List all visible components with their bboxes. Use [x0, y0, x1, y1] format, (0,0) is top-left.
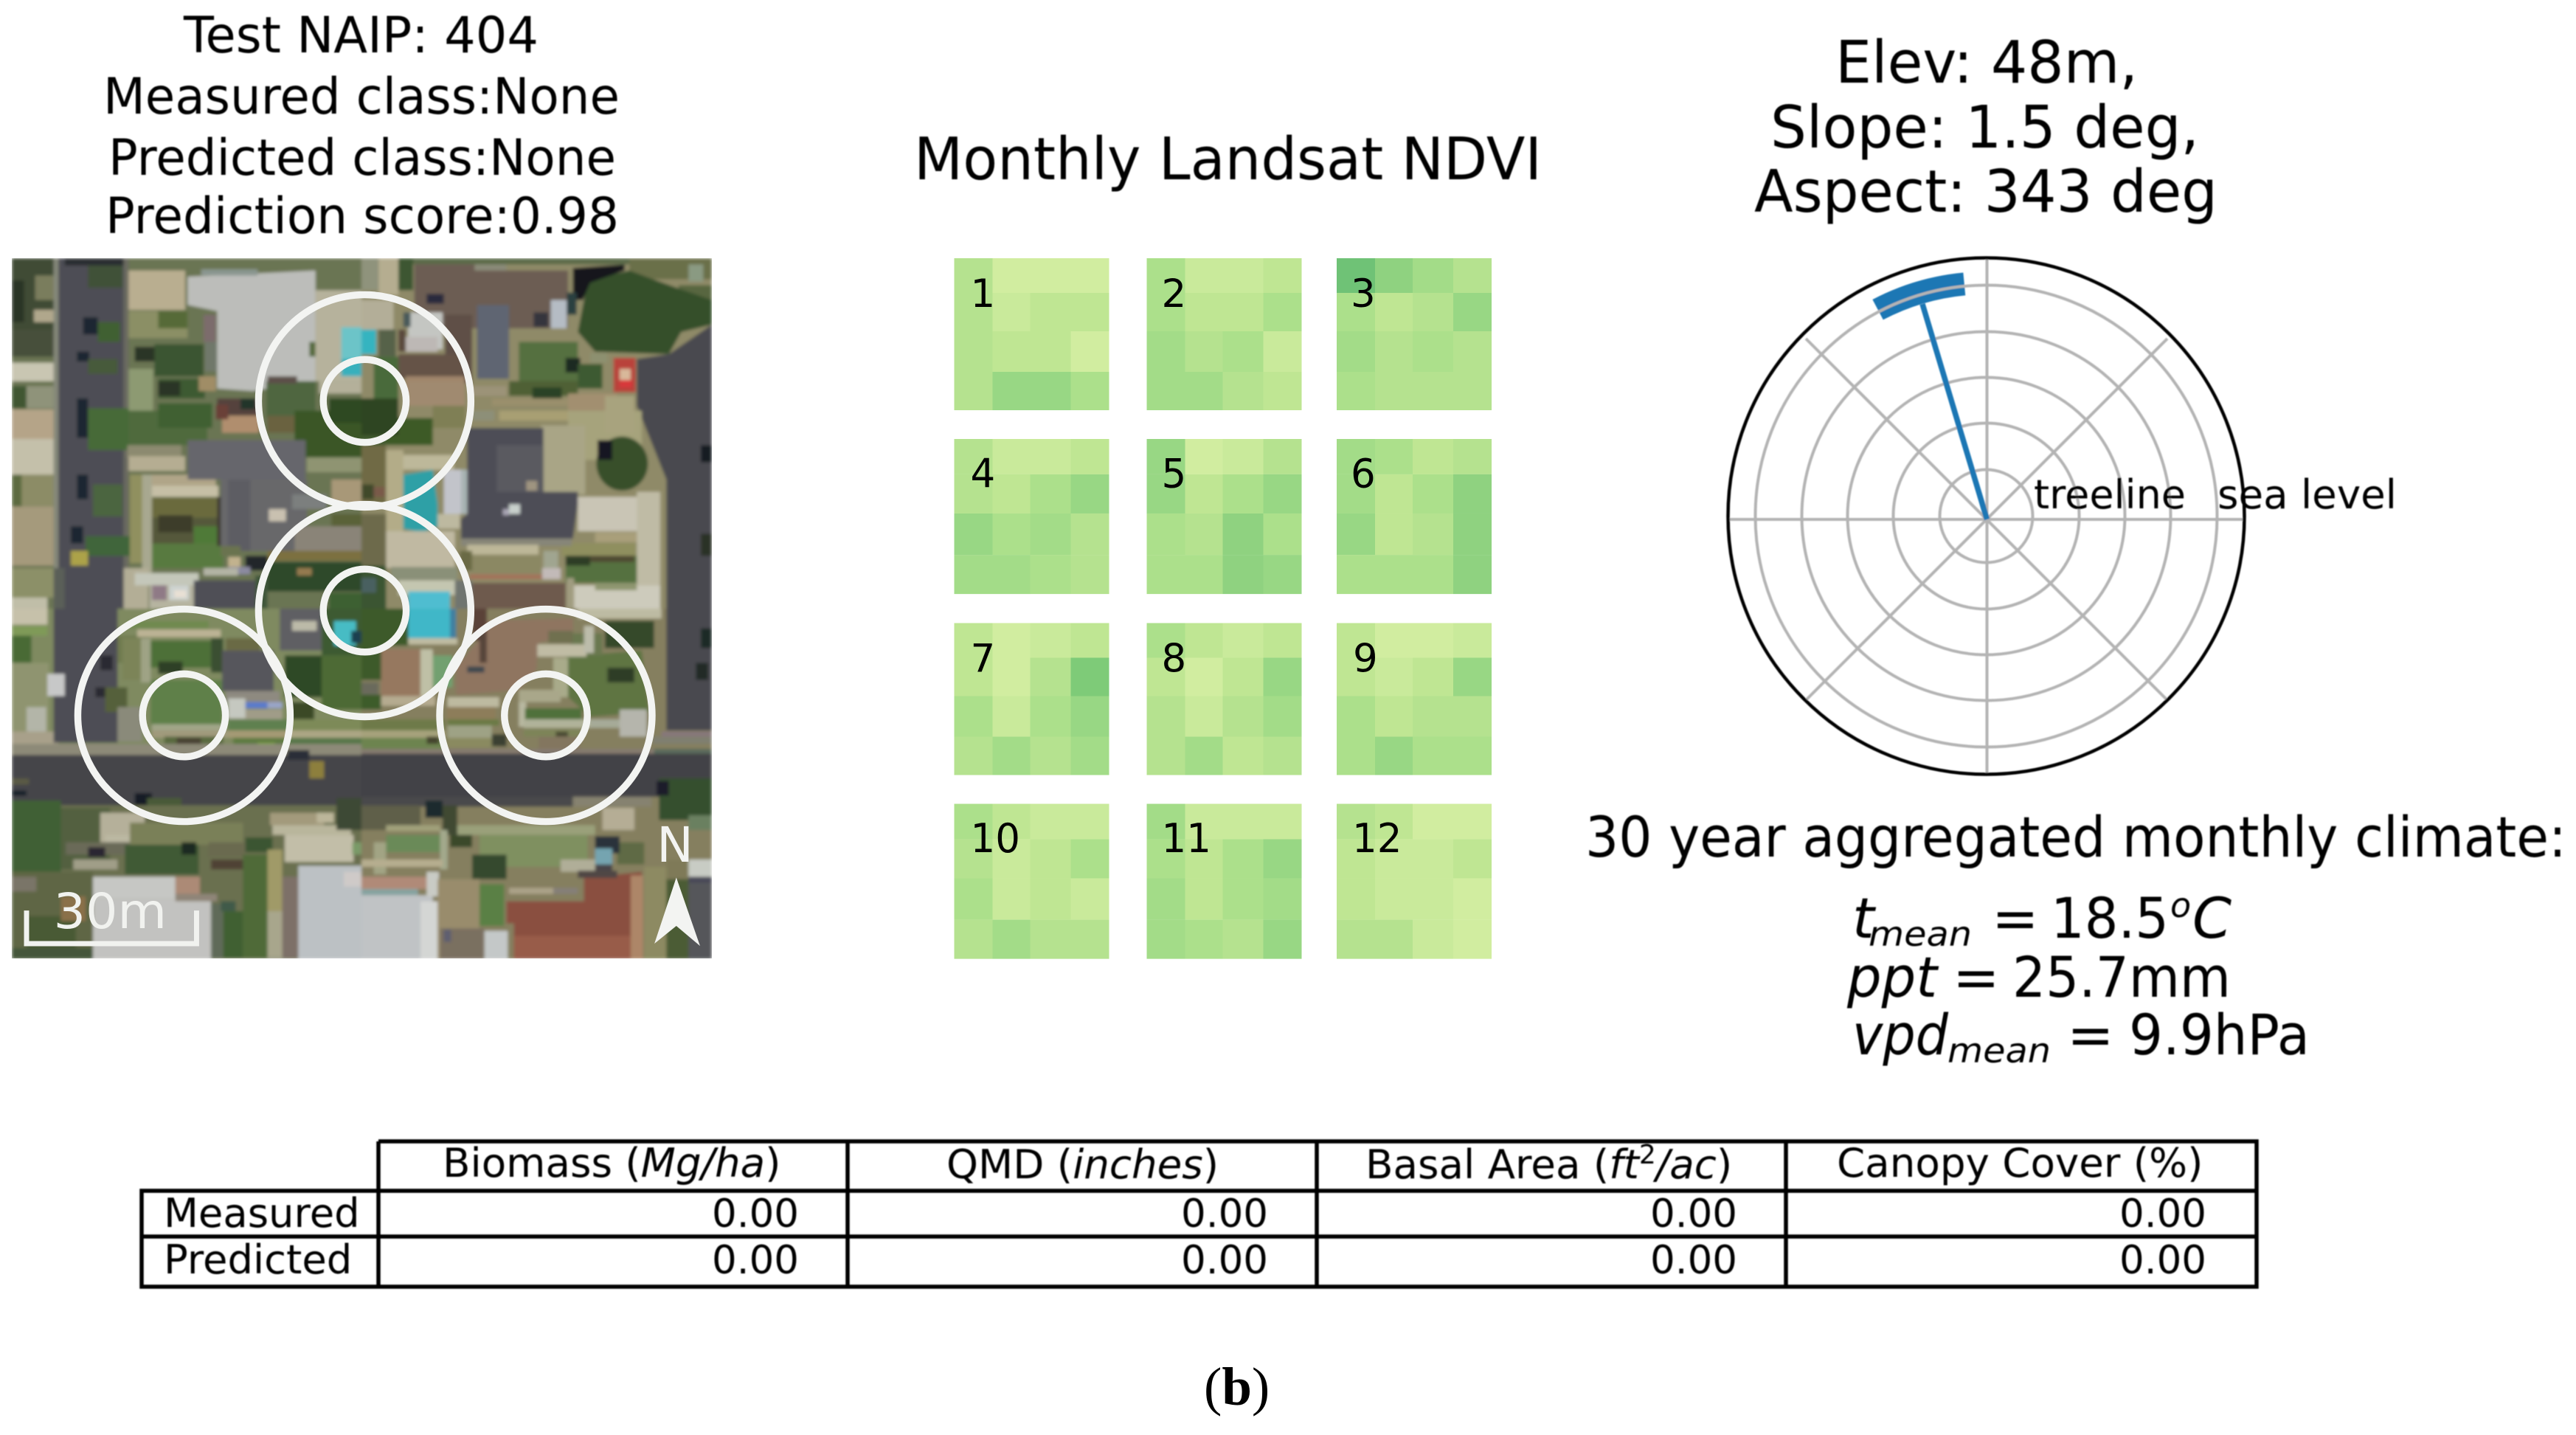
table: measured vs predicted [142, 1139, 2257, 1287]
tile: month 4: 4 [971, 450, 995, 497]
north arrow: N [657, 816, 693, 874]
heading: elevation slope aspect: Slope: 1.5 deg, [1770, 94, 2199, 162]
tile: month 12 [1337, 804, 1492, 959]
tile: month 1 [955, 258, 1109, 410]
table row: measured: 0.00 [1650, 1192, 1737, 1237]
tile: month 12: 12 [1352, 815, 1402, 862]
table row: predicted: 0.00 [2119, 1238, 2206, 1283]
heading: elevation slope aspect: Aspect: 343 deg [1754, 158, 2217, 226]
north arrow [654, 816, 700, 946]
tile: month 9 [1337, 623, 1492, 775]
tile: month 10: 10 [971, 815, 1020, 862]
text: climate values: 25.7mm [2012, 944, 2231, 1010]
title: test NAIP header: Predicted class:None [108, 129, 616, 187]
tile: month 7 [955, 623, 1109, 775]
table row: predicted [164, 1237, 2206, 1283]
tile: month 8: 8 [1161, 636, 1186, 682]
tile: month 8 [1146, 623, 1301, 775]
tile: month 6 [1337, 439, 1492, 594]
tile: month 7: 7 [971, 636, 995, 682]
heading: elevation slope aspect: Elev: 48m, [1835, 29, 2138, 97]
text: climate values: 9.9hPa [2129, 1002, 2310, 1068]
title: test NAIP header: Prediction score:0.98 [105, 187, 619, 246]
title: test NAIP header: Test NAIP: 404 [183, 7, 539, 65]
text: climate values: = [2067, 1002, 2114, 1068]
title: test NAIP header: Measured class:None [103, 68, 620, 126]
text: climate values: = [1992, 885, 2039, 951]
text: climate values: = [1953, 944, 2000, 1010]
table header row: 2 [1639, 1140, 1656, 1170]
scale bar: 30m [54, 882, 167, 940]
table header row [443, 1139, 2203, 1188]
chart: polar terrain plot [1728, 257, 2397, 775]
tile: month 3: 3 [1351, 272, 1376, 317]
text: climate values [1846, 885, 2310, 1071]
table row: measured: 0.00 [712, 1192, 799, 1237]
heading: elevation slope aspect [1754, 29, 2217, 226]
text: climate values: t [1852, 885, 1877, 951]
table row: predicted: 0.00 [1650, 1238, 1737, 1283]
table row: measured [164, 1190, 2206, 1237]
panel: NAIP aerial image [12, 258, 712, 959]
text: climate values: mean [1947, 1031, 2051, 1071]
tile: month 3 [1337, 258, 1492, 410]
tile: month 11 [1146, 804, 1301, 959]
label: treeline: treeline [2034, 471, 2186, 518]
tile: month 5: 5 [1161, 450, 1186, 497]
text: climate values: o [2170, 885, 2191, 925]
aspect line [1922, 304, 1987, 519]
tile: month 1: 1 [971, 272, 995, 317]
caption: panel label b: (b) [1204, 1357, 1270, 1417]
tile: month 2: 2 [1161, 272, 1186, 317]
text: climate values: 18.5 [2051, 885, 2169, 951]
tile: month 11: 11 [1161, 815, 1211, 862]
table row: measured: 0.00 [2119, 1192, 2206, 1237]
tile: month 5 [1146, 439, 1301, 594]
text: climate values: C [2192, 885, 2232, 951]
label: sea level: sea level [2217, 471, 2397, 518]
heading: monthly Landsat NDVI: Monthly Landsat NDVI [914, 125, 1542, 193]
tile: month 4 [955, 439, 1109, 594]
text: climate values: vpd [1852, 1002, 1949, 1068]
table row: measured: Measured [164, 1190, 360, 1237]
tile: month 2 [1146, 258, 1301, 410]
tile: month 6: 6 [1351, 450, 1376, 497]
table header row: QMD (inches) [946, 1141, 1219, 1188]
text: climate values: ppt [1846, 944, 1939, 1010]
text: climate values: mean [1869, 914, 1972, 954]
table header row: ) [1717, 1141, 1732, 1188]
tile: month 9: 9 [1353, 636, 1378, 682]
scale bar [27, 882, 196, 944]
table row: predicted: 0.00 [1181, 1238, 1268, 1283]
title: test NAIP header [103, 7, 620, 246]
table header row: Canopy Cover (%) [1837, 1139, 2203, 1186]
table row: predicted: 0.00 [712, 1238, 799, 1283]
table row: predicted: Predicted [164, 1237, 352, 1283]
circles: plot markers [77, 294, 652, 822]
table header row: Basal Area (ft [1365, 1141, 1639, 1188]
table header row: /ac [1653, 1141, 1717, 1188]
tile: month 10 [955, 804, 1109, 959]
table row: measured: 0.00 [1181, 1192, 1268, 1237]
aspect marker arc [1878, 284, 1964, 310]
table header row: Biomass (Mg/ha) [443, 1139, 781, 1186]
